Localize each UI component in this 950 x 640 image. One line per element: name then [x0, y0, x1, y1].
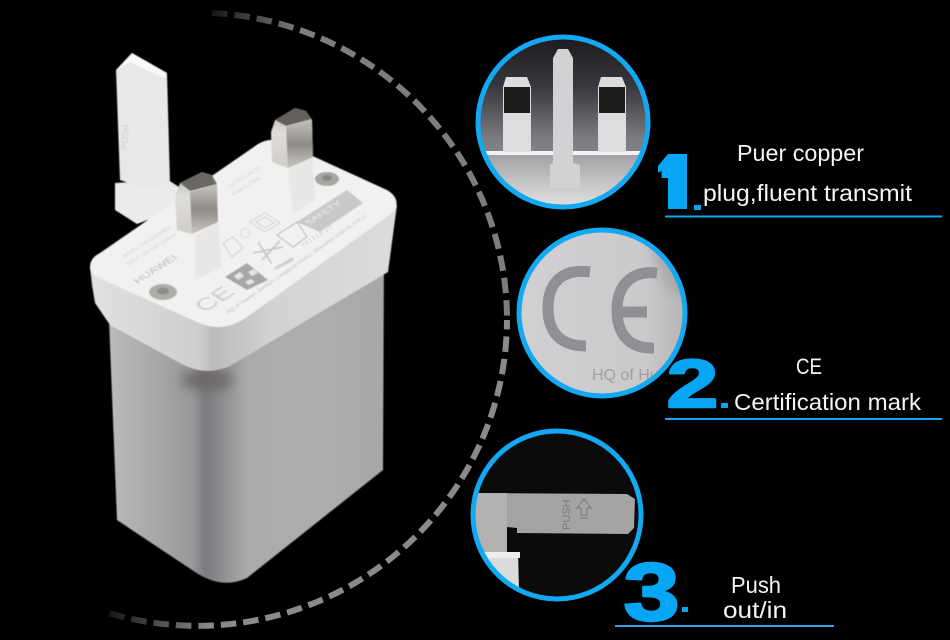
shadow under lip — [181, 370, 233, 390]
text 3: out/in — [723, 597, 787, 623]
text 2 — [734, 354, 922, 415]
pin 2, rear — [271, 108, 315, 214]
text 3 — [723, 572, 787, 623]
charger body — [109, 250, 384, 583]
text 2: CE — [796, 354, 822, 379]
plate markings: MODEL: HW-050200B01 — [122, 225, 173, 260]
number 1 — [658, 154, 701, 210]
plate markings: OUTPUT: 5V 2A — [228, 165, 262, 190]
number 3: 3 — [624, 547, 680, 638]
number 1: 1 — [639, 137, 704, 231]
pin 1, front — [175, 172, 222, 280]
text 1: plug,fluent transmit — [703, 180, 913, 206]
left pin detail — [503, 77, 531, 152]
text 3: Push — [731, 572, 781, 598]
dashed arc — [105, 13, 507, 626]
text 1 — [703, 140, 913, 206]
underline 3 — [615, 625, 834, 627]
plate markings: INPUT: 100-240V 50/60Hz — [126, 231, 179, 268]
charger photo — [90, 53, 397, 583]
right pin detail — [598, 77, 626, 152]
earth pin, rear — [115, 53, 200, 224]
qr code — [225, 263, 268, 290]
feature 2: circle photo of CE mark — [515, 228, 692, 398]
screw left — [149, 284, 177, 300]
underline 1 — [665, 216, 942, 218]
plate markings: CE — [189, 283, 240, 316]
slider block — [488, 558, 519, 587]
earth pin, rear: PUSH — [119, 124, 131, 150]
feature 2: circle photo of CE mark: HQ of Huawei — [592, 367, 692, 384]
plate markings: Made in China — [231, 175, 262, 198]
underline 2 — [665, 418, 942, 420]
text 1: Puer copper — [737, 140, 864, 166]
feature 3: circle photo of push tab — [470, 431, 641, 599]
tab — [507, 493, 635, 534]
plate edge — [90, 205, 397, 371]
plate top surface — [90, 140, 397, 327]
arrow marking — [577, 499, 591, 518]
screw right — [315, 172, 339, 186]
safety mark — [250, 190, 363, 249]
plate markings: HQ of Huawei, Bantian, Longgang District, Shenzhen 518129, P.R.C. — [226, 213, 368, 316]
disposal icon — [253, 241, 283, 264]
centre earth pin — [550, 49, 580, 188]
plate markings: HUAWEI — [131, 253, 181, 285]
push label: PUSH — [561, 499, 573, 530]
number 2: 2 — [667, 347, 718, 422]
safety mark: SAFETY — [303, 200, 344, 226]
feature 1: circle photo of pins — [476, 35, 650, 209]
safety mark: 7 6 1 5 1 6 - 1 1 — [301, 224, 334, 249]
text 2: Certification mark — [734, 389, 922, 415]
plate markings — [122, 165, 368, 316]
